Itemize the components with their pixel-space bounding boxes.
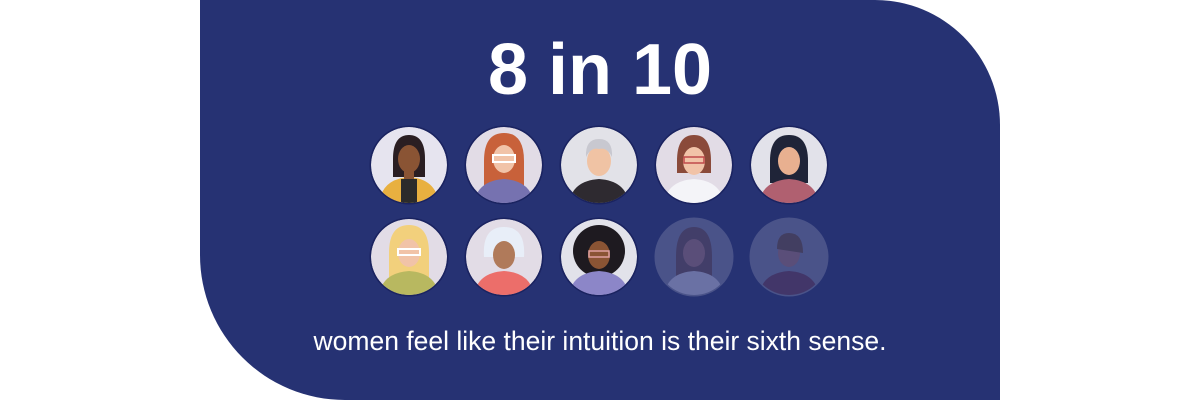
avatar 3 [560, 126, 638, 205]
avatar 4 [654, 126, 734, 205]
title: 8 in 10 [488, 30, 712, 110]
avatar 2 [464, 126, 544, 205]
avatar 6 [370, 218, 448, 297]
avatar 9 dimmed [654, 218, 734, 297]
caption: women feel like their intuition is their sixth sense. [313, 326, 886, 356]
avatar 5 [750, 126, 828, 205]
avatar grid [370, 126, 828, 297]
avatar 10 dimmed [750, 218, 828, 297]
avatar 1 [370, 126, 448, 205]
panel: navy background [200, 0, 1000, 400]
avatar 7 [464, 218, 544, 297]
avatar 8 [560, 218, 638, 297]
